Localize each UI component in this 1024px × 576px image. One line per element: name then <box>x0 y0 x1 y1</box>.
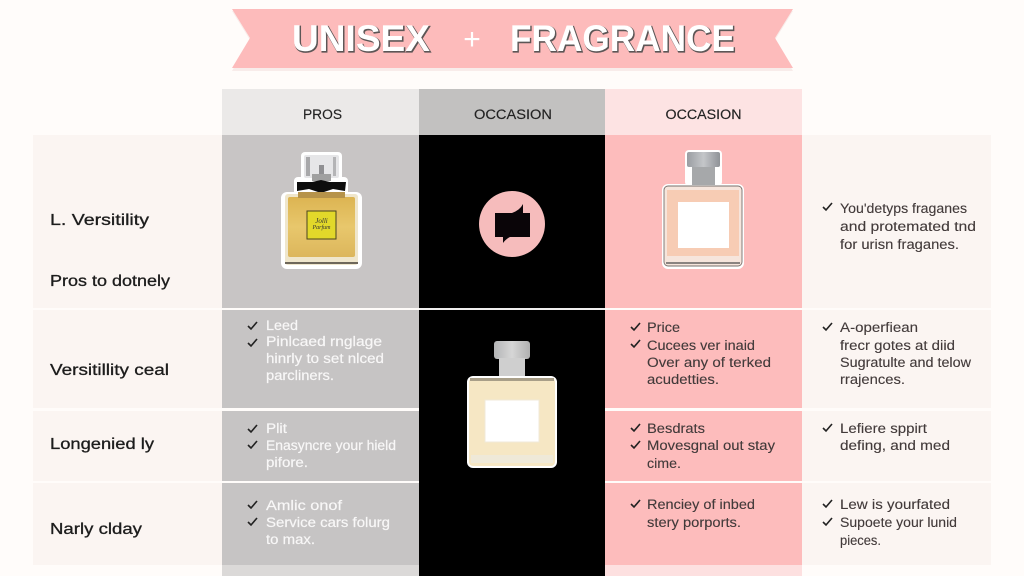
panel: notes column <box>802 135 991 565</box>
panel: pink occasion column: Renciey of inbed <box>647 497 755 512</box>
panel: pink occasion column: cime. <box>647 456 681 471</box>
panel: notes column: defing, and med <box>840 438 950 453</box>
panel: pink occasion column: Cucees ver inaid <box>647 338 755 353</box>
panel: pros column: Plit <box>266 421 287 436</box>
panel: pros column: hinrly to set nlced <box>266 351 384 366</box>
panel: row labels column <box>33 135 222 565</box>
panel: notes column: for urisn fraganes. <box>840 237 959 252</box>
panel: pros column: to max. <box>266 532 315 547</box>
icon: gold perfume bottle: Parfum <box>312 224 331 231</box>
table header row <box>222 89 802 135</box>
panel: notes column: frecr gotes at diid <box>840 338 955 353</box>
panel: pros column: Amlic onof <box>266 498 342 513</box>
panel: pink occasion column <box>605 135 802 576</box>
panel: notes column: Supoete your lunid <box>840 515 957 530</box>
panel: notes column: You'detyps fraganes <box>840 201 967 216</box>
panel: pros column: parcliners. <box>266 368 334 383</box>
icon: gold perfume bottle: Jolli <box>315 217 328 225</box>
panel: pink occasion column: Price <box>647 320 680 335</box>
icon: gold perfume bottle <box>281 152 362 269</box>
title banner: UNISEX <box>293 19 431 60</box>
table header row: PROS <box>303 107 342 122</box>
panel: pros column: Pinlcaed rnglage <box>266 334 382 349</box>
panel: row labels column: Versitillity ceal <box>50 362 169 379</box>
panel: pink occasion column: Over any of terked <box>647 355 771 370</box>
title banner <box>232 9 793 71</box>
panel: pros column: pifore. <box>266 455 308 470</box>
panel: pros column <box>222 135 419 576</box>
panel: pink occasion column: stery porports. <box>647 515 741 530</box>
title banner: + <box>463 23 481 56</box>
table header row: OCCASION <box>666 107 742 122</box>
panel: pink occasion column: Movesgnal out stay <box>647 438 775 453</box>
title banner: UNISEX <box>292 18 430 59</box>
panel: notes column: Sugratulte and telow <box>840 355 971 370</box>
title banner: FRAGRANCE <box>511 19 736 60</box>
panel: row labels column: L. Versitility <box>50 212 149 229</box>
panel: row labels column: Narly clday <box>50 521 142 538</box>
panel: notes column: A-operfiean <box>840 320 918 335</box>
icon: peach perfume bottle <box>662 150 744 269</box>
panel: notes column: rrajences. <box>840 372 905 387</box>
icon: cream perfume bottle <box>467 341 557 468</box>
panel: pros column: Enasyncre your hield <box>266 438 396 453</box>
panel: notes column: and protemated tnd <box>840 219 976 234</box>
panel: pros column: Leed <box>266 318 298 333</box>
table header row: OCCASION <box>474 107 552 122</box>
panel: row labels column: Pros to dotnely <box>50 273 170 290</box>
panel: pink occasion column: acudetties. <box>647 372 719 387</box>
panel: notes column: Lew is yourfated <box>840 497 950 512</box>
panel: notes column: pieces. <box>840 533 881 548</box>
title banner: FRAGRANCE <box>510 18 735 59</box>
panel: pros column: Service cars folurg <box>266 515 390 530</box>
icon: chat bubble badge <box>479 191 545 257</box>
panel: pink occasion column: Besdrats <box>647 421 705 436</box>
panel: black occasion column <box>419 135 605 576</box>
panel: notes column: Lefiere sppirt <box>840 421 927 436</box>
panel: row labels column: Longenied ly <box>50 436 154 453</box>
